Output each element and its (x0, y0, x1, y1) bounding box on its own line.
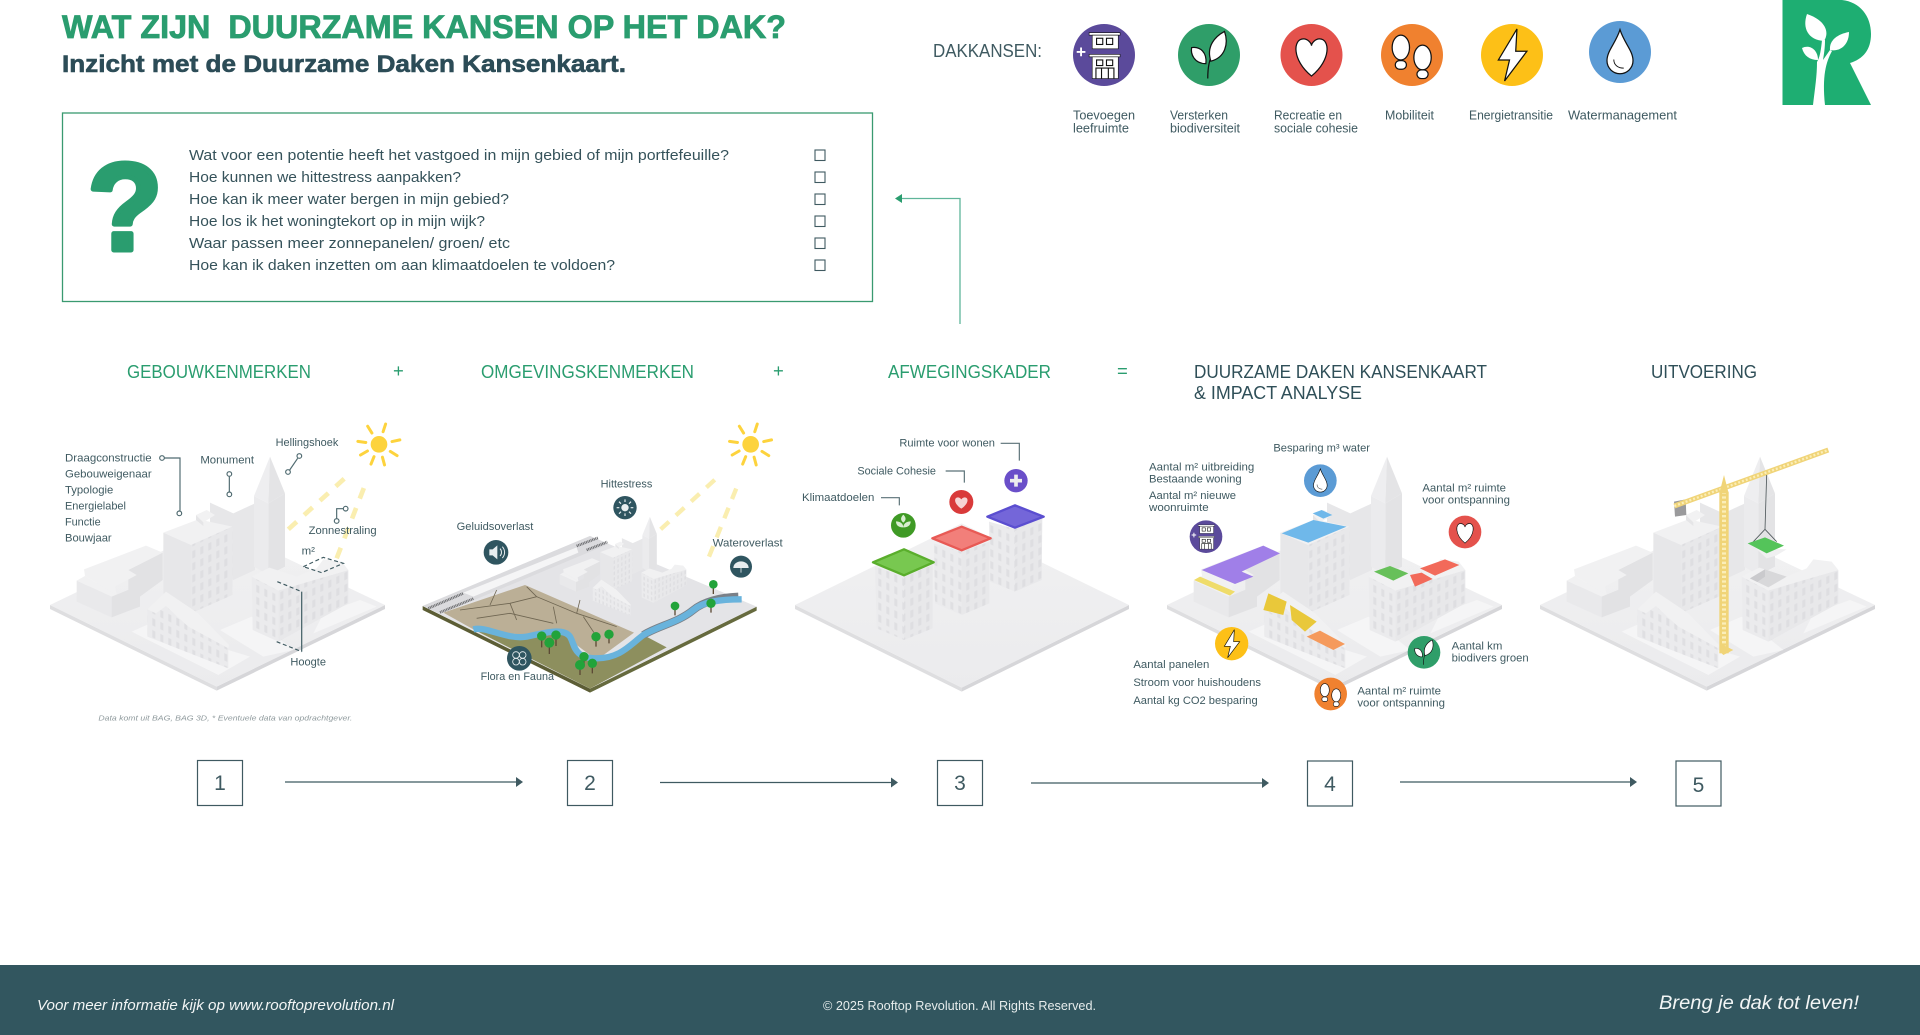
step 2: 2 (584, 772, 596, 795)
icon labels: Toevoegen (1073, 108, 1135, 122)
footer (0, 965, 1920, 1035)
icon: leaf (1408, 636, 1440, 669)
impact labels: Aantal m² ruimte (1357, 686, 1441, 698)
connectors (160, 454, 348, 652)
impact labels: Aantal m² nieuwe (1149, 490, 1236, 502)
step 5 (1676, 761, 1721, 806)
impact labels: biodivers groen (1452, 653, 1529, 665)
icon: feet (1314, 678, 1347, 710)
arrow: feedback to questions (895, 194, 960, 324)
illustration: platform (795, 523, 1129, 692)
arrow 4 to 5 (1400, 777, 1637, 787)
section headings (127, 360, 1757, 403)
step 3 (938, 760, 982, 806)
footer: website: Voor meer informatie kijk op www.rooftoprevolution.nl (37, 997, 395, 1014)
attribute labels (200, 437, 377, 668)
icon: energy (1215, 627, 1248, 660)
icon: mobiliteit (1381, 24, 1443, 86)
building attributes list: Bouwjaar (65, 532, 112, 544)
icon: flora en fauna (507, 646, 532, 671)
labels (802, 438, 995, 504)
question list: Hoe los ik het woningtekort op in mijn wijk? (189, 213, 485, 230)
step 4: 4 (1324, 773, 1336, 796)
section headings: UITVOERING (1651, 361, 1757, 382)
labels: Geluidsoverlast (457, 521, 533, 533)
icon: sun (358, 424, 400, 465)
checkboxes (815, 150, 825, 270)
building: green roof (873, 549, 934, 640)
building attributes list: Typologie (65, 484, 113, 496)
impact labels: Aantal m² ruimte (1422, 482, 1506, 494)
heading: dakkansen: DAKKANSEN: (933, 41, 1042, 61)
step 1 (198, 760, 242, 806)
illustration: city model (1167, 457, 1502, 691)
question list: Hoe kan ik meer water bergen in mijn gebied? (189, 191, 509, 208)
panel 2: omgevingskenmerken (423, 424, 783, 693)
impact labels: Aantal m² uitbreiding (1149, 462, 1254, 474)
attribute labels: Hellingshoek (276, 437, 339, 449)
section headings: OMGEVINGSKENMERKEN (481, 361, 694, 382)
building attributes list: Gebouweigenaar (65, 468, 152, 480)
question list: Hoe kan ik daken inzetten om aan klimaatdoelen te voldoen? (189, 257, 615, 274)
panel 5: uitvoering (1540, 450, 1875, 691)
building attributes list: Functie (65, 516, 101, 528)
arrow 1 to 2 (285, 777, 523, 787)
icon: recreatie (1280, 24, 1342, 86)
icon labels: Watermanagement (1568, 108, 1678, 122)
icon: housing (1190, 520, 1222, 553)
icon: energietransitie (1481, 24, 1543, 86)
section headings: + (393, 360, 404, 381)
impact labels: Besparing m³ water (1273, 443, 1370, 455)
step row (198, 760, 1721, 806)
open roof (1750, 569, 1787, 587)
section headings: AFWEGINGSKADER (888, 361, 1051, 382)
icon labels (1073, 108, 1678, 136)
panel 4: kansenkaart (1133, 443, 1529, 710)
impact labels: Stroom voor huishoudens (1133, 677, 1262, 689)
icon row: dakkansen (1073, 21, 1651, 86)
icon: sociale cohesie (949, 490, 973, 514)
impact labels: voor ontspanning (1357, 698, 1445, 710)
icon labels: biodiversiteit (1170, 122, 1241, 136)
illustration: mini city (560, 517, 686, 615)
impact labels: Bestaande woning (1149, 474, 1242, 486)
impact labels: woonruimte (1148, 502, 1209, 514)
icon labels: sociale cohesie (1274, 122, 1358, 136)
panel: questions (62, 113, 872, 302)
arrow 3 to 4 (1031, 778, 1269, 788)
icon labels: leefruimte (1073, 122, 1129, 136)
step 2 (568, 760, 612, 806)
icon: versterken biodiversiteit (1178, 24, 1240, 86)
section headings: GEBOUWKENMERKEN (127, 361, 311, 382)
step 5: 5 (1693, 774, 1704, 797)
icon labels: Mobiliteit (1385, 108, 1435, 122)
attribute labels: Zonnestraling (309, 525, 377, 537)
panel 1: gebouwkenmerken (50, 424, 400, 723)
question list (189, 147, 729, 274)
building attributes list: Draagconstructie (65, 453, 152, 465)
building: purple roof (987, 505, 1044, 592)
impact labels: Aantal km (1452, 641, 1502, 653)
step 4 (1308, 761, 1352, 806)
icon: watermanagement (1589, 21, 1651, 83)
impact labels: Aantal kg CO2 besparing (1133, 695, 1258, 707)
logo (1782, 0, 1871, 105)
trees (537, 580, 718, 675)
labels: Hittestress (601, 478, 653, 490)
section headings: + (773, 360, 784, 381)
illustration: city model (50, 457, 385, 691)
connectors (881, 443, 1019, 505)
icon labels: Energietransitie (1469, 108, 1553, 122)
footer: slogan: Breng je dak tot leven! (1659, 993, 1860, 1014)
icon: question mark: ? (88, 139, 162, 277)
subtitle: Inzicht met de Duurzame Daken Kansenkaart. (62, 51, 626, 78)
step 1: 1 (214, 772, 226, 795)
impact labels (1133, 443, 1529, 710)
question list: Waar passen meer zonnepanelen/ groen/ etc (189, 235, 511, 252)
icon: geluidsoverlast (484, 540, 508, 565)
labels: Sociale Cohesie (857, 465, 936, 477)
question list: Wat voor een potentie heeft het vastgoed in mijn gebied of mijn portfefeuille? (189, 147, 729, 164)
question list: Hoe kunnen we hittestress aanpakken? (189, 169, 461, 186)
hanging green roof (1748, 475, 1787, 558)
icon: klimaatdoelen (891, 513, 916, 538)
icon: water (1304, 464, 1337, 497)
icon: sun (730, 424, 772, 465)
attribute labels: Hoogte (290, 656, 326, 668)
section headings: = (1117, 360, 1128, 381)
labels: Flora en Fauna (481, 671, 555, 683)
illustration: city model (1540, 457, 1875, 691)
arrow 2 to 3 (660, 778, 898, 788)
title: WAT ZIJN DUURZAME KANSEN OP HET DAK? (62, 9, 786, 45)
labels: Ruimte voor wonen (899, 438, 995, 450)
labels: Wateroverlast (713, 538, 783, 550)
icon: wateroverlast (730, 556, 752, 578)
step 3: 3 (954, 772, 966, 795)
illustration: terrain (423, 536, 757, 693)
labels (457, 478, 783, 683)
footer: copyright: © 2025 Rooftop Revolution. All Rights Reserved. (823, 998, 1096, 1013)
building: red roof (932, 527, 991, 615)
building attributes list: Energielabel (65, 500, 126, 512)
icon: toevoegen leefruimte (1073, 24, 1135, 86)
data note: Data komt uit BAG, BAG 3D, * Eventuele data van opdrachtgever. (98, 714, 352, 723)
sun rays (288, 475, 366, 558)
icon labels: Recreatie en (1274, 108, 1342, 122)
building attributes list (65, 453, 152, 544)
impact labels: Aantal panelen (1133, 659, 1209, 671)
icon: ruimte voor wonen (1004, 469, 1028, 492)
attribute labels: m² (302, 546, 315, 558)
icon labels: Versterken (1170, 108, 1228, 122)
attribute labels: Monument (200, 455, 254, 467)
crane (1674, 450, 1828, 655)
panel 3: afwegingskader (795, 438, 1129, 692)
icon: hittestress (613, 496, 637, 519)
section headings: & IMPACT ANALYSE (1194, 382, 1362, 403)
labels: Klimaatdoelen (802, 492, 874, 504)
icon: heart (1449, 516, 1481, 548)
coloured roofs (1194, 510, 1459, 650)
sun rays (661, 475, 738, 557)
impact labels: voor ontspanning (1422, 494, 1510, 506)
section headings: DUURZAME DAKEN KANSENKAART (1194, 361, 1487, 382)
